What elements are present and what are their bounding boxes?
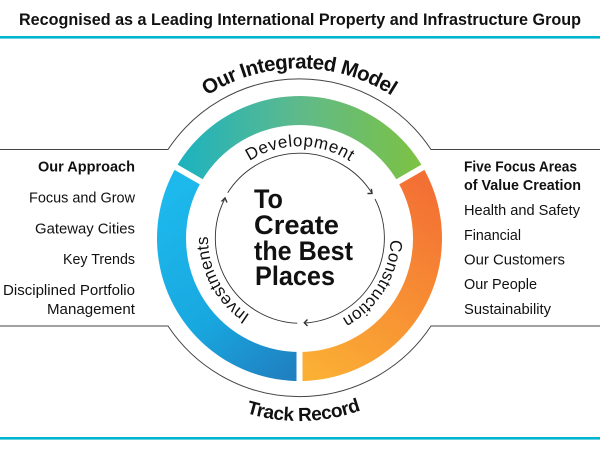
title: Recognised as a Leading International Property and Infrastructure Group <box>19 11 581 29</box>
arrow: investments to development <box>215 198 297 323</box>
item: Key Trends <box>63 251 135 268</box>
centre statement: the Best <box>254 236 353 266</box>
item: Our People <box>464 276 537 293</box>
heading: Track Record: Track Record <box>249 398 360 422</box>
label: Development: Development <box>245 134 354 162</box>
item: Our Customers <box>464 252 565 268</box>
item: Management <box>47 301 136 318</box>
item: Focus and Grow <box>29 190 135 206</box>
panel: Five Focus Areas of Value Creation <box>464 158 581 318</box>
label: Construction: Construction <box>343 240 402 325</box>
centre statement: To <box>254 184 283 214</box>
heading: Our Approach: Our Approach <box>38 158 135 176</box>
arrow: development to construction <box>228 153 372 194</box>
outer frame lines <box>0 79 600 397</box>
bottom rule <box>0 437 600 440</box>
centre statement: Create <box>254 210 339 240</box>
item: Health and Safety <box>464 202 580 219</box>
heading line 1: Five Focus Areas <box>464 158 577 176</box>
item: Disciplined Portfolio <box>3 282 135 299</box>
centre statement <box>254 184 353 291</box>
heading: Our Integrated Model: Our Integrated Model <box>202 55 398 95</box>
item: Gateway Cities <box>35 220 135 238</box>
gradient ring <box>157 96 442 384</box>
label: Investments: Investments <box>198 237 249 324</box>
panel: Our Approach <box>3 158 136 318</box>
item: Sustainability <box>464 301 551 318</box>
heading line 2: of Value Creation <box>464 177 581 194</box>
item: Financial <box>464 227 521 244</box>
inner cycle arrows <box>215 153 384 326</box>
ring segment: investments <box>157 167 300 381</box>
ring segment: construction <box>300 167 442 381</box>
centre statement: Places <box>255 261 335 291</box>
top rule <box>0 36 600 39</box>
ring segment: development <box>176 96 423 182</box>
arrow: construction to investments <box>304 199 384 326</box>
